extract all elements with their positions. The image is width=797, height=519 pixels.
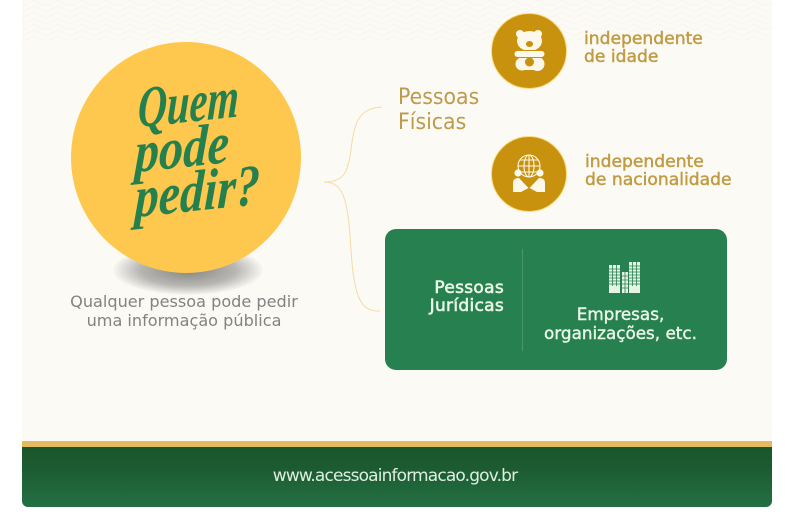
heading text: pode: pode — [134, 110, 230, 185]
label: Pessoas Jurídicas — [428, 278, 504, 316]
label: Pessoas Jurídicas: Jurídicas — [430, 296, 504, 316]
bracket connector — [324, 106, 382, 312]
text: independente de nacionalidade: independente — [585, 152, 704, 171]
subtitle text — [70, 292, 298, 330]
footer band — [22, 447, 772, 507]
footer url: www.acessoainformacao.gov.br — [273, 466, 517, 486]
panel: Pessoas Jurídicas — [385, 229, 727, 370]
label: Pessoas Físicas: Pessoas — [398, 85, 479, 110]
subtitle text: uma informação pública — [87, 311, 281, 330]
label: Pessoas Físicas: Físicas — [398, 110, 466, 135]
gold stripe — [22, 441, 772, 447]
top chevron pattern — [22, 0, 772, 40]
text: independente de nacionalidade: de nacionalidade — [585, 170, 732, 189]
icon: globe with people — [491, 136, 567, 212]
heading circle: Quem pode pedir? — [71, 42, 301, 273]
icon: teddy bear — [491, 13, 567, 89]
subtitle text: Qualquer pessoa pode pedir — [70, 292, 298, 311]
text: Empresas, organizações, etc.: organizações, etc. — [544, 323, 697, 343]
text: independente de idade: de idade — [584, 47, 658, 66]
divider — [522, 249, 523, 351]
panel: cream background — [22, 0, 772, 441]
text: independente de idade: independente — [584, 29, 703, 48]
label: Pessoas Físicas — [398, 85, 479, 135]
yellow circle shadow — [113, 245, 263, 295]
icon: buildings — [609, 262, 640, 293]
text: independente de nacionalidade — [585, 152, 732, 189]
text: independente de idade — [584, 29, 703, 66]
heading text: pedir?: pedir? — [134, 152, 261, 230]
text: Empresas, organizações, etc. — [544, 304, 697, 343]
label: Pessoas Jurídicas: Pessoas — [434, 278, 504, 298]
heading text: Quem: Quem — [137, 64, 240, 140]
text: Empresas, organizações, etc.: Empresas, — [577, 304, 664, 324]
